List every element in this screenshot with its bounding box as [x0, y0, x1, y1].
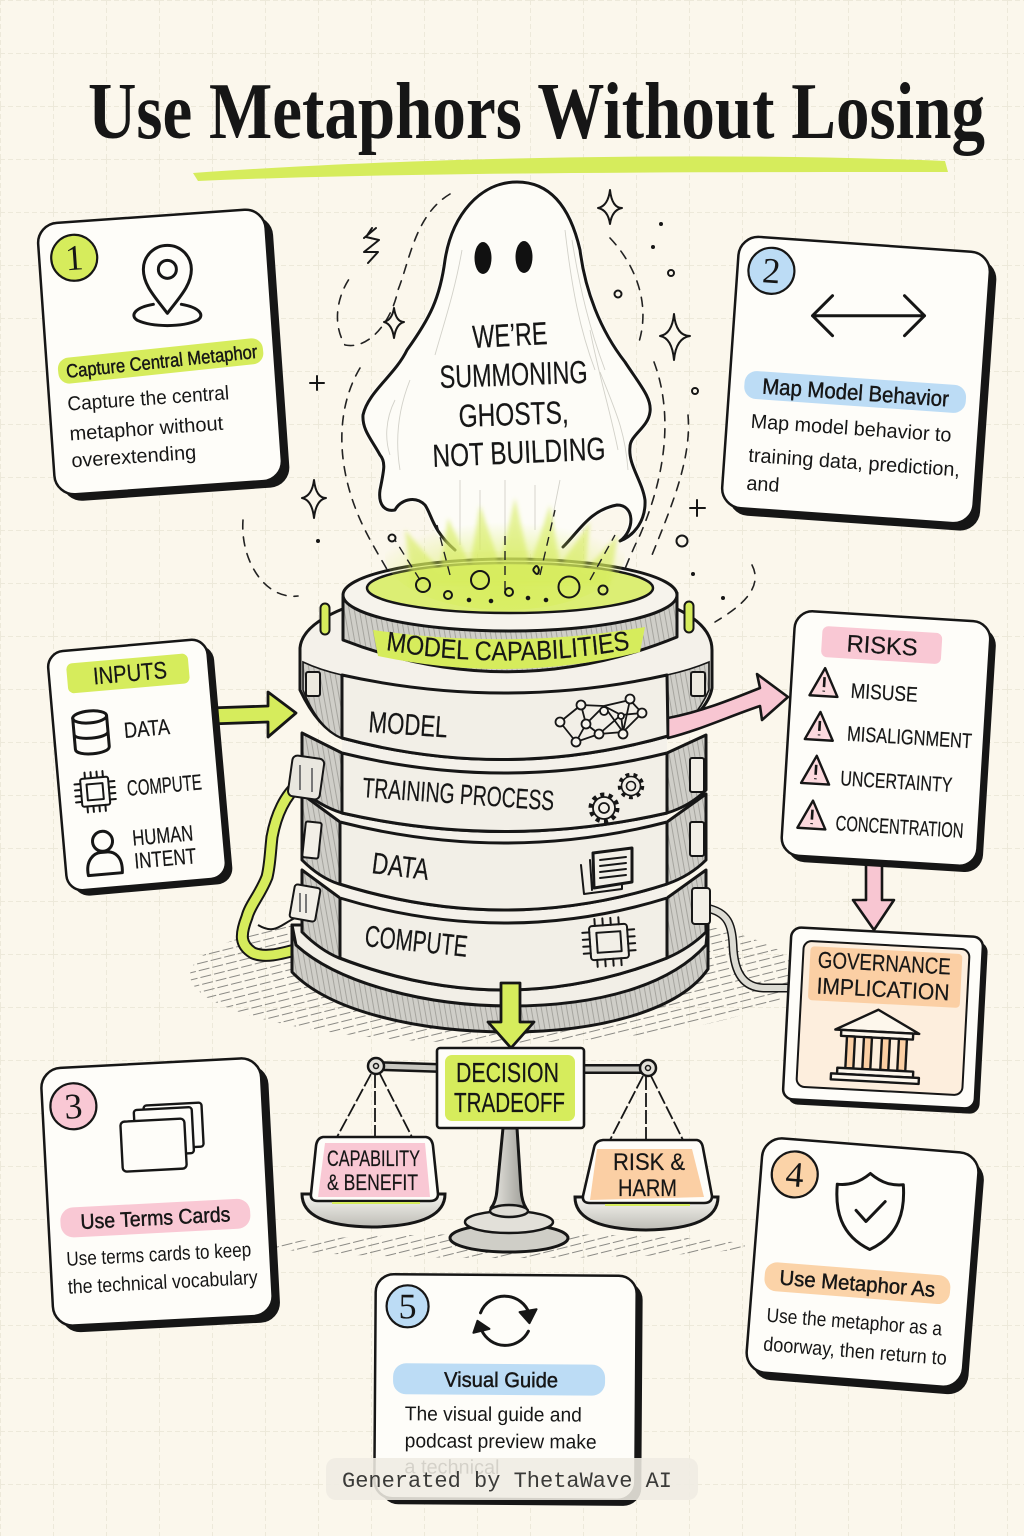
card body: the technical vocabulary	[67, 1267, 258, 1299]
risk: misalignment: MISALIGNMENT	[846, 723, 973, 753]
doodles around the ghost	[243, 190, 755, 622]
tier: data: DATA	[370, 847, 431, 887]
tier: model: MODEL	[368, 706, 449, 744]
card body: doorway, then return to	[762, 1334, 948, 1370]
panel: card 4 use metaphor as	[745, 1137, 986, 1396]
icon: gears	[591, 775, 642, 821]
heading highlight	[743, 370, 967, 414]
icon: stacked cards	[119, 1103, 205, 1172]
governance label	[808, 946, 962, 1008]
arrow: risks to governance	[853, 860, 894, 930]
icon: refresh arrows	[473, 1296, 537, 1346]
ghost message	[432, 315, 606, 474]
right pan: risk and harm	[575, 1140, 718, 1230]
card body: Capture the central	[67, 382, 230, 416]
panel: card 2 map model behavior	[720, 236, 998, 532]
risk: misuse: MISUSE	[850, 680, 918, 707]
risk: concentration: CONCENTRATION	[835, 812, 964, 843]
panel: card 4 use metaphor as: Use Metaphor As	[779, 1267, 936, 1302]
risk: uncertainty: UNCERTAINTY	[840, 767, 953, 797]
bubbles	[416, 566, 608, 602]
right grey power cable	[706, 908, 792, 988]
arrow: stack to risks	[668, 674, 788, 738]
left pan: capability and benefit: CAPABILITY	[327, 1146, 420, 1171]
panel: card 5 visual guide	[374, 1274, 643, 1506]
badge 2	[747, 246, 796, 295]
icon: compute chip	[581, 916, 637, 968]
icon: double arrow	[813, 296, 925, 336]
tier: data	[302, 794, 706, 910]
glowing cauldron	[342, 558, 678, 674]
ghost drape shading	[387, 230, 628, 550]
card body: Use the metaphor as a	[766, 1305, 944, 1341]
badge 4	[770, 1150, 819, 1199]
card body	[762, 1305, 950, 1370]
ghost message: GHOSTS,	[458, 394, 569, 434]
right pan: risk and harm: HARM	[618, 1175, 677, 1202]
badge 5	[386, 1285, 429, 1327]
decision tradeoff box: TRADEOFF	[454, 1087, 565, 1118]
badge 2: 2	[761, 250, 782, 291]
floor shading under the stack	[190, 907, 800, 1043]
scale beam	[337, 1058, 683, 1140]
ghost	[363, 182, 650, 550]
ghost message: WE’RE	[471, 315, 548, 355]
scale floor shading	[275, 1234, 745, 1258]
card body: Map model behavior to	[750, 411, 952, 447]
heading highlight	[60, 1198, 251, 1238]
right pan: risk and harm: RISK &	[613, 1149, 685, 1176]
panel: inputs	[47, 638, 234, 897]
panel: risks	[780, 610, 997, 873]
input: human intent: HUMAN	[131, 820, 194, 851]
scale	[275, 1048, 745, 1258]
input: compute	[74, 762, 204, 813]
ghost eyes	[474, 241, 532, 274]
heading highlight	[393, 1363, 605, 1396]
risk: concentration	[797, 800, 965, 843]
tier: compute: COMPUTE	[363, 920, 469, 964]
decision tradeoff box: DECISION	[456, 1057, 559, 1088]
input: data: DATA	[123, 714, 171, 743]
tier: compute	[302, 870, 706, 990]
arrow: inputs to stack	[209, 692, 296, 737]
card body: training data, prediction,	[748, 445, 961, 481]
card body	[746, 411, 963, 509]
panel: card 1 capture central metaphor: Capture Central Metaphor	[65, 342, 259, 383]
icon: shield with check	[836, 1173, 904, 1250]
card body: metaphor without	[69, 413, 224, 445]
watermark	[326, 1458, 698, 1500]
panel: risks: RISKS	[846, 630, 918, 662]
arrow: stack to decision	[488, 983, 534, 1048]
risk: misuse	[809, 667, 919, 707]
panel: governance implication	[782, 927, 988, 1114]
card body	[404, 1403, 597, 1480]
panel: governance implication: GOVERNANCE	[817, 947, 951, 979]
input: human intent	[84, 820, 197, 878]
badge 5: 5	[398, 1286, 417, 1326]
ghost message: NOT BUILDING	[432, 430, 606, 474]
title underline highlight	[193, 156, 948, 181]
tier: model	[300, 608, 712, 760]
card body: overextending	[71, 442, 197, 472]
panel: inputs: INPUTS	[92, 657, 168, 690]
icon: neural network	[556, 694, 646, 746]
connector tabs	[287, 606, 710, 924]
card body: The visual guide and	[405, 1403, 582, 1427]
card body: a technical	[404, 1456, 500, 1479]
left pan: capability and benefit: & BENEFIT	[327, 1170, 418, 1195]
panel: card 3 use terms cards: Use Terms Cards	[80, 1203, 231, 1234]
inputs label	[66, 653, 190, 694]
badge 1	[50, 233, 99, 282]
card body: podcast preview make	[405, 1430, 597, 1454]
card body: and	[746, 473, 780, 497]
risk: misalignment	[805, 711, 973, 753]
card body	[67, 382, 234, 472]
panel: card 3 use terms cards	[40, 1057, 281, 1334]
panel: governance implication: IMPLICATION	[816, 972, 950, 1005]
icon: location pin	[134, 245, 201, 326]
input: human intent: INTENT	[133, 843, 197, 874]
tier: training process	[302, 733, 706, 832]
panel: card 5 visual guide: Visual Guide	[444, 1369, 558, 1392]
risk: uncertainty	[801, 755, 954, 797]
risks label	[821, 626, 942, 664]
heading highlight	[57, 337, 264, 385]
badge 3	[49, 1082, 98, 1130]
scale stand	[450, 1128, 568, 1252]
tier: training process: TRAINING PROCESS	[362, 772, 555, 816]
left pan: capability and benefit	[302, 1137, 445, 1227]
badge 3: 3	[63, 1086, 83, 1127]
card body: Use terms cards to keep	[66, 1239, 252, 1271]
ghost message: SUMMONING	[439, 354, 588, 395]
input: compute: COMPUTE	[126, 769, 203, 801]
watermark: Generated by ThetaWave AI	[342, 1468, 672, 1494]
model capabilities label: MODEL CAPABILITIES	[388, 632, 628, 661]
glow rising from cauldron	[385, 498, 625, 610]
heading highlight	[764, 1261, 951, 1305]
panel: card 1 capture central metaphor	[37, 208, 291, 503]
panel: card 2 map model behavior: Map Model Behavior	[761, 374, 950, 411]
base plate	[292, 925, 708, 1032]
badge 4: 4	[784, 1154, 805, 1195]
card body	[66, 1239, 258, 1299]
badge 1: 1	[64, 237, 85, 278]
layered model stack	[287, 606, 712, 1032]
icon: institution building	[831, 1007, 922, 1084]
decision tradeoff box	[437, 1048, 584, 1128]
icon: data documents	[581, 848, 632, 894]
input: data	[72, 704, 172, 755]
left lime power cable	[242, 783, 300, 955]
